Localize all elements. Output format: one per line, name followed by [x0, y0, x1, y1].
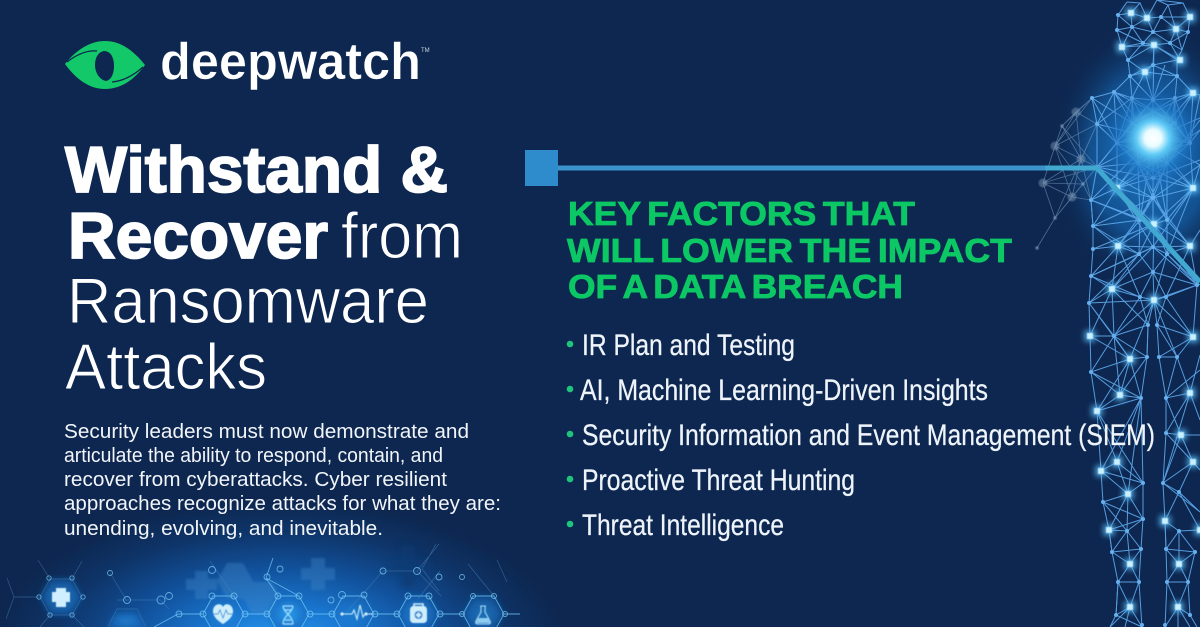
- connector line with square: [525, 150, 1200, 282]
- list item: AI: AI, Machine Learning-Driven Insights: [580, 374, 988, 407]
- heading: key factors: OF A DATA BREACH: [568, 268, 903, 305]
- title: [65, 133, 463, 403]
- network node rings: [37, 566, 508, 617]
- list item: threat hunting: Proactive Threat Hunting: [582, 464, 855, 497]
- icon: first aid kit: [410, 604, 427, 623]
- title: Ransomware: [67, 264, 429, 337]
- title: Recover: [68, 199, 328, 272]
- intro paragraph: unending, evolving, and inevitable.: [64, 518, 383, 540]
- arm nodes: [1037, 112, 1083, 248]
- intro paragraph: Security leaders must now demonstrate and: [64, 421, 469, 443]
- key factors list: [567, 329, 1155, 542]
- title: from: [341, 199, 463, 272]
- intro paragraph: [64, 421, 501, 540]
- icon: green eye: [65, 41, 145, 89]
- list item: threat intelligence: Threat Intelligence: [582, 509, 784, 542]
- mesh small nodes: [1089, 15, 1197, 625]
- human figure network: [1037, 0, 1200, 627]
- intro paragraph: articulate the ability to respond, contain, and: [64, 445, 443, 467]
- hexagon fills: [40, 579, 504, 627]
- heading: key factors: WILL LOWER THE IMPACT: [567, 232, 1012, 269]
- heading: key factors: KEY FACTORS THAT: [568, 195, 915, 232]
- icon: pulse line: [340, 605, 373, 619]
- intro paragraph: recover from cyberattacks. Cyber resilient: [64, 469, 447, 491]
- mesh bright nodes: [1090, 13, 1200, 607]
- bright network lines: [154, 558, 520, 627]
- trademark: TM: [421, 48, 430, 54]
- heading: key factors: [567, 195, 1012, 305]
- logo: deepwatch: [65, 33, 430, 91]
- title: Withstand &: [65, 133, 448, 206]
- icon: lab flask: [476, 606, 490, 624]
- body mesh lines: [1089, 0, 1200, 627]
- medical hexagon network: [0, 480, 600, 627]
- icon: heart with pulse: [213, 604, 233, 624]
- list item: IR plan: IR Plan and Testing: [582, 329, 795, 362]
- dim network lines: [6, 544, 507, 627]
- faded plus shapes: [186, 558, 335, 614]
- heart glow: [1101, 86, 1200, 190]
- wordmark: deepwatch: [160, 33, 421, 91]
- intro paragraph: approaches recognize attacks for what they are:: [64, 493, 501, 515]
- faded left arm mesh: [1037, 98, 1097, 248]
- title: Attacks: [65, 330, 267, 403]
- icon: medical plus: [52, 588, 70, 607]
- icon: dna helix: [283, 606, 293, 624]
